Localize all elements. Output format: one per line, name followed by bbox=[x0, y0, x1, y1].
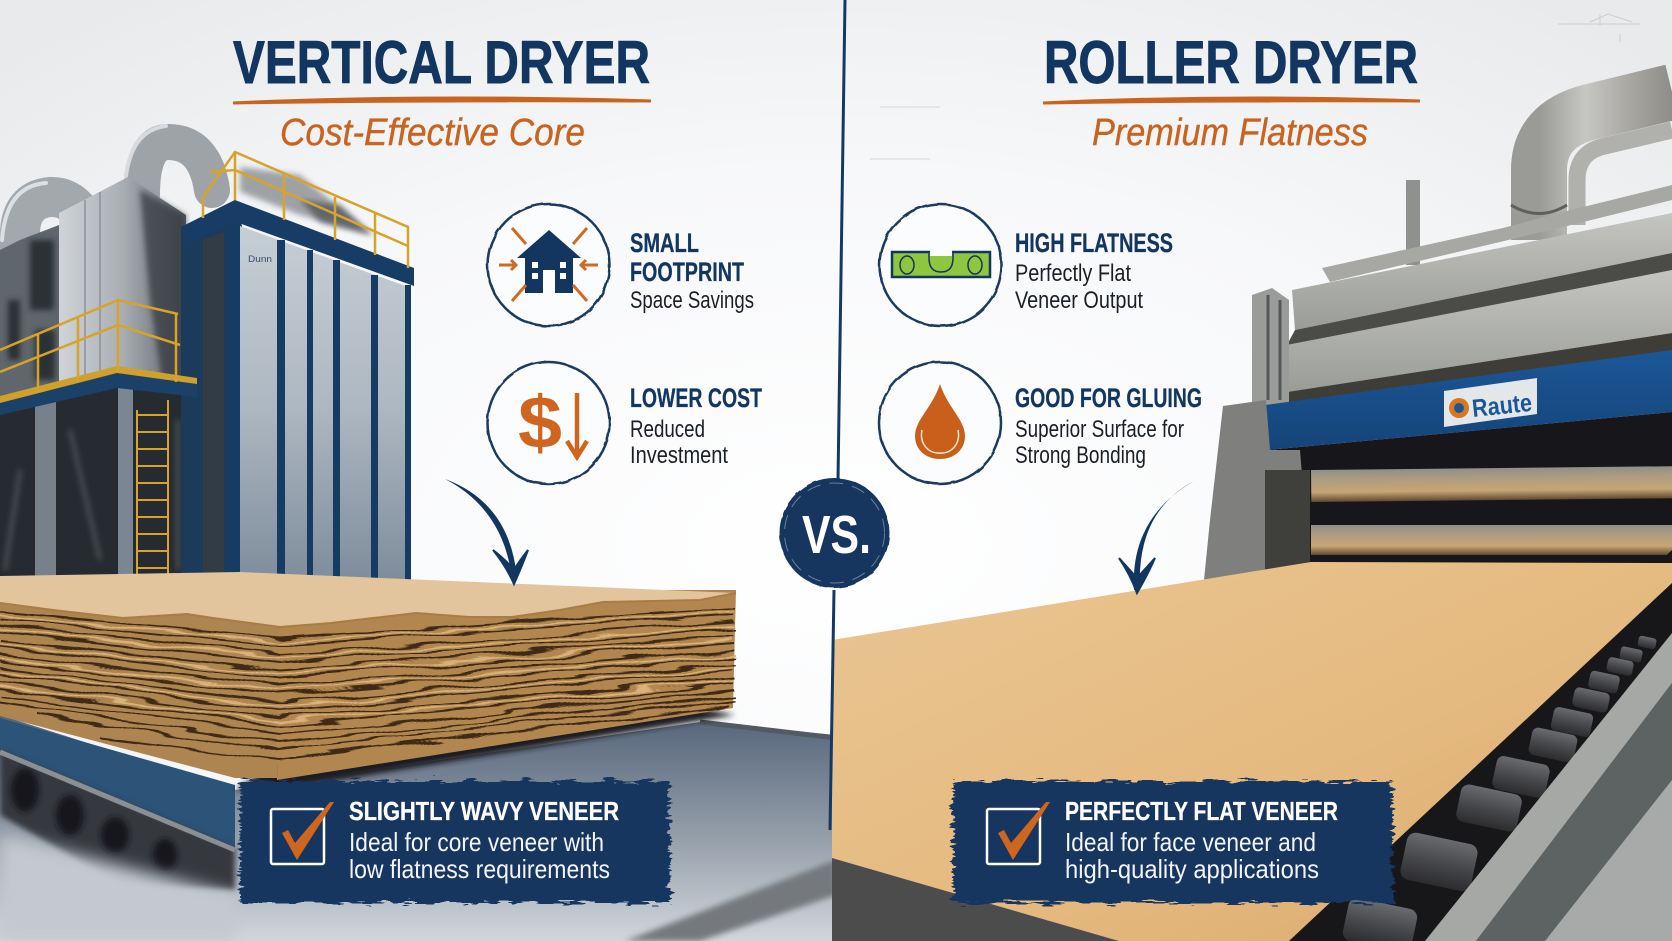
roof ducts behind rail bbox=[240, 167, 373, 235]
duct flange ring bbox=[1511, 205, 1567, 214]
callout: slightly wavy veneer bbox=[240, 781, 670, 903]
blue band bbox=[1265, 350, 1672, 450]
subtitle: Premium Flatness bbox=[1092, 112, 1368, 154]
stack right face bbox=[277, 590, 736, 780]
icon: dollar and down arrow: $ bbox=[518, 381, 562, 464]
feature: small footprint: SMALL bbox=[630, 228, 699, 258]
icon: dollar and down arrow bbox=[488, 362, 610, 484]
second pipe bbox=[1577, 130, 1672, 225]
feature: high flatness: Veneer Output bbox=[1015, 287, 1143, 314]
navy side of dryer tower bbox=[181, 200, 242, 583]
upper rail bbox=[1322, 185, 1672, 282]
illustration: floor and conveyor left bbox=[0, 715, 836, 941]
VS badge bbox=[780, 478, 890, 588]
wavy veneer stack bbox=[0, 572, 736, 790]
top beam bbox=[181, 200, 414, 286]
feature: good for gluing: Superior Surface for bbox=[1015, 416, 1184, 443]
subtitle: Cost-Effective Core bbox=[280, 112, 585, 154]
icon: checkbox bbox=[987, 802, 1050, 864]
callout: perfectly flat veneer: PERFECTLY FLAT VENEER bbox=[1065, 796, 1338, 826]
silver casing bbox=[59, 177, 186, 400]
steel side rail bbox=[1425, 633, 1672, 941]
Raute label: Raute bbox=[1471, 389, 1533, 423]
upper railing bbox=[203, 152, 408, 268]
icon: spirit level bbox=[880, 204, 1002, 326]
stack left face bbox=[0, 590, 280, 778]
feature: good for gluing: GOOD FOR GLUING bbox=[1015, 383, 1202, 413]
icon: checkbox bbox=[271, 802, 334, 864]
sheet front edge bbox=[0, 593, 736, 627]
grey band 2 bbox=[1287, 270, 1672, 392]
feature: high flatness: HIGH FLATNESS bbox=[1015, 228, 1173, 258]
ladder bbox=[137, 400, 168, 578]
center divider line bbox=[830, 0, 845, 830]
area right of rail bbox=[1476, 683, 1672, 941]
illustration: vertical dryer machine bbox=[0, 126, 414, 583]
left pipes bbox=[2, 126, 212, 400]
platform with yellow rail bbox=[0, 366, 197, 404]
title: vertical dryer: VERTICAL DRYER bbox=[233, 29, 650, 96]
feature: small footprint: Space Savings bbox=[630, 287, 754, 314]
feature: good for gluing bbox=[879, 362, 1202, 484]
grey band 1 bbox=[1292, 213, 1672, 330]
navy columns bbox=[226, 222, 411, 583]
dark foreground lower left of sheet bbox=[832, 858, 1119, 941]
veneer layer lines bbox=[0, 608, 734, 760]
underline bbox=[1043, 98, 1420, 103]
callout: slightly wavy veneer: low flatness requirements bbox=[349, 854, 610, 884]
illustration: roller dryer machine bbox=[1204, 92, 1672, 580]
illustration: conveyor rollers right bbox=[1270, 550, 1672, 941]
feature: good for gluing: Strong Bonding bbox=[1015, 442, 1146, 469]
feature: high flatness: Perfectly Flat bbox=[1015, 260, 1131, 287]
grey frame post bbox=[1252, 288, 1289, 405]
callout: perfectly flat veneer: Ideal for face veneer and bbox=[1065, 827, 1316, 857]
dark lower frame bbox=[0, 378, 232, 583]
callout: perfectly flat veneer bbox=[953, 781, 1393, 903]
dark gap bbox=[1287, 253, 1672, 345]
title: vertical dryer bbox=[233, 29, 651, 154]
dryer panels bbox=[240, 226, 411, 583]
feature: lower cost: LOWER COST bbox=[630, 383, 762, 413]
dark area below bbox=[1268, 412, 1672, 570]
feature: lower cost: Investment bbox=[630, 442, 728, 469]
icon: compact house with arrows bbox=[488, 204, 610, 326]
faint sketch marks bbox=[870, 14, 1640, 159]
floor right bbox=[1545, 780, 1672, 941]
title: roller dryer: ROLLER DRYER bbox=[1044, 29, 1418, 96]
stack shadow bbox=[235, 708, 735, 790]
VS badge: VS. bbox=[802, 505, 871, 565]
feature: lower cost bbox=[488, 362, 762, 484]
Raute label bbox=[1444, 378, 1537, 427]
feature: small footprint: FOOTPRINT bbox=[630, 257, 744, 287]
flat veneer sheet bbox=[832, 562, 1672, 941]
small stack pipe bbox=[1406, 180, 1420, 265]
arrow right bbox=[1119, 481, 1194, 593]
stack top sheet bbox=[0, 572, 736, 627]
icon: glue drop bbox=[879, 362, 1001, 484]
title: roller dryer bbox=[1043, 29, 1420, 154]
callout: slightly wavy veneer: SLIGHTLY WAVY VENEER bbox=[349, 796, 619, 826]
callout: slightly wavy veneer: Ideal for core veneer with bbox=[349, 827, 604, 857]
far-left dark duct section bbox=[0, 225, 59, 412]
feature: small footprint bbox=[488, 204, 754, 326]
callout: perfectly flat veneer: high-quality applications bbox=[1065, 854, 1319, 884]
grey machine frame bbox=[1204, 400, 1310, 580]
main duct bbox=[1539, 92, 1672, 240]
rollers bbox=[1311, 466, 1672, 502]
feature: lower cost: Reduced bbox=[630, 416, 705, 443]
dark gap 2 bbox=[1265, 333, 1672, 406]
arrow left bbox=[445, 479, 528, 584]
dryer nameplate: Dunn bbox=[248, 254, 272, 264]
underline bbox=[233, 98, 651, 103]
feature: high flatness bbox=[880, 204, 1173, 326]
